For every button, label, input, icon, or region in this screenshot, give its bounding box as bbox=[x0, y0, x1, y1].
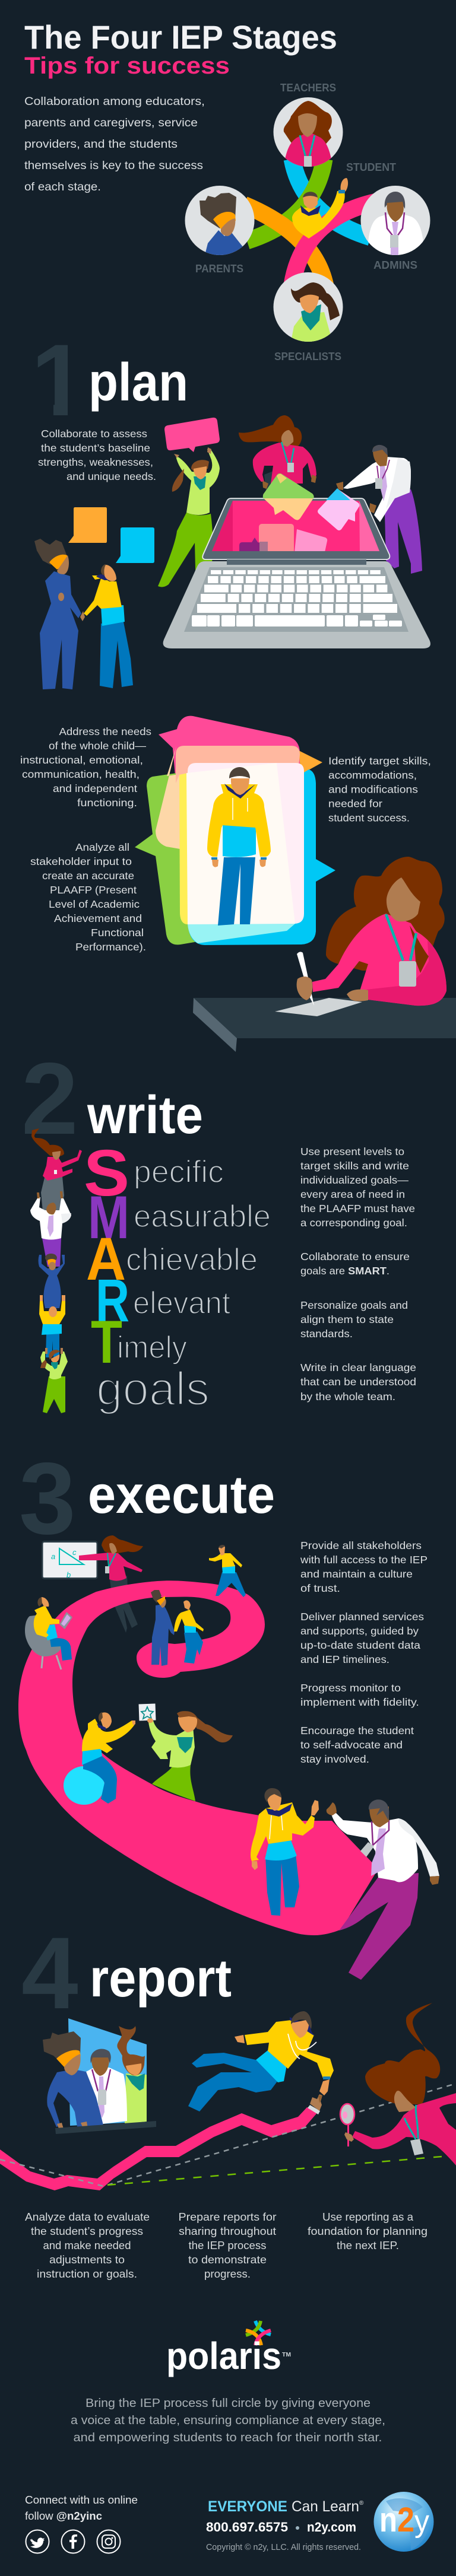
figure: parent bbox=[43, 2031, 103, 2130]
stage 2 text: Personalize goals and bbox=[300, 1299, 408, 1311]
n2y globe logo: y bbox=[414, 2504, 429, 2539]
social text: follow @n2yinc bbox=[25, 2510, 102, 2522]
label: parents: PARENTS bbox=[195, 262, 243, 275]
figure: running student bbox=[209, 1545, 246, 1597]
stage 1 PLAAFP text: create an accurate bbox=[42, 870, 134, 882]
stage 1 PLAAFP text: Functional bbox=[91, 927, 144, 939]
stage 3 heading bbox=[19, 1442, 275, 1556]
SMART acronym: chievable bbox=[126, 1242, 258, 1277]
paper bbox=[275, 998, 362, 1016]
stage 4 column 3 text: Use reporting as a bbox=[322, 2211, 414, 2223]
polaris logo: polaris bbox=[166, 2335, 281, 2377]
stage 1 text: the student’s baseline bbox=[41, 442, 150, 454]
icon: twitter bbox=[26, 2530, 49, 2553]
stage 1 whole child text: Address the needs bbox=[59, 726, 151, 737]
stage 4 column 3 text: the next IEP. bbox=[337, 2240, 399, 2251]
stage 3 heading: 3 bbox=[19, 1442, 76, 1556]
stage 4 illustration bbox=[0, 2003, 456, 2190]
n2y contact block: n2y.com bbox=[307, 2520, 356, 2534]
figure: parent bbox=[38, 1254, 65, 1308]
figure: specialist bbox=[40, 1348, 68, 1413]
intro text: Collaboration among educators, bbox=[24, 95, 205, 108]
stage 1 target skills text: Identify target skills, bbox=[328, 755, 431, 767]
figure: teacher bbox=[31, 1128, 82, 1211]
stage 2 heading: 2 bbox=[21, 1042, 78, 1156]
figure: student on ball bbox=[64, 1712, 135, 1805]
dashed target line: grey bbox=[0, 2084, 456, 2186]
stage 2 heading bbox=[21, 1042, 203, 1156]
SMART acronym: T bbox=[91, 1308, 122, 1376]
closing statement: a voice at the table, ensuring compliance at every stage, bbox=[71, 2413, 385, 2427]
figure: woman with magnifier bbox=[340, 2003, 456, 2165]
title: Tips for success bbox=[24, 53, 230, 79]
stakeholder diagram bbox=[185, 81, 430, 362]
speech bubble: orange bbox=[68, 507, 107, 543]
stage 1 PLAAFP text: stakeholder input to bbox=[30, 856, 132, 867]
stage 4 column 1 text: instruction or goals. bbox=[37, 2268, 137, 2280]
bubble: pink bbox=[159, 716, 300, 783]
stage 2 text: Collaborate to ensure bbox=[300, 1251, 410, 1262]
stage 3 text bbox=[300, 1540, 428, 1765]
whiteboard bbox=[42, 1541, 98, 1579]
stage 2 text: by the whole team. bbox=[300, 1391, 395, 1403]
stage 1 target skills text bbox=[328, 755, 431, 823]
intro text: of each stage. bbox=[24, 180, 101, 193]
stage 1 text: Collaborate to assess bbox=[41, 428, 147, 440]
stage 3 text: Progress monitor to bbox=[300, 1682, 401, 1694]
figure: student bbox=[292, 178, 348, 238]
hand and paintbrush bbox=[308, 2105, 320, 2114]
closing statement: and empowering students to reach for their north star. bbox=[74, 2431, 382, 2444]
stage 2 text: target skills and write bbox=[300, 1160, 409, 1172]
stage 4 column 1 text: adjustments to bbox=[49, 2254, 125, 2266]
avatar: teachers bbox=[273, 97, 343, 167]
stage 4 heading: report bbox=[90, 1949, 232, 2008]
social icons bbox=[26, 2530, 120, 2553]
stage 1 target skills text: accommodations, bbox=[328, 769, 417, 781]
figure: admin bbox=[336, 445, 422, 574]
avatar: parents bbox=[185, 186, 254, 256]
stage 4 heading bbox=[21, 1916, 232, 2030]
SMART acronym: A bbox=[86, 1225, 126, 1293]
stage 4 column 2 text: Prepare reports for bbox=[178, 2211, 277, 2223]
bubble overlaps bbox=[188, 924, 295, 943]
SMART acronym: M bbox=[88, 1184, 129, 1251]
stage 3 text: of trust. bbox=[300, 1582, 340, 1594]
stage 2 text: align them to state bbox=[300, 1314, 394, 1325]
figure: teacher bbox=[239, 415, 316, 492]
trend ribbon bbox=[0, 2107, 319, 2190]
desk bbox=[193, 998, 456, 1052]
n2y globe logo bbox=[374, 2492, 433, 2552]
closing statement: Bring the IEP process full circle by giving everyone bbox=[86, 2396, 370, 2410]
SMART acronym: R bbox=[96, 1267, 129, 1334]
whiteboard: a bbox=[51, 1552, 55, 1561]
figure: specialist with bubble bbox=[158, 418, 220, 593]
SMART acronym: elevant bbox=[133, 1286, 230, 1321]
stage 1 heading: plan bbox=[88, 353, 188, 412]
laptop screen bbox=[202, 473, 390, 565]
figure: admin bbox=[30, 1191, 71, 1267]
n2y globe logo: n bbox=[379, 2501, 397, 2539]
social text bbox=[25, 2494, 138, 2522]
figure: specialist with star card bbox=[139, 1704, 233, 1801]
stage 3 text: Deliver planned services bbox=[300, 1611, 424, 1623]
SMART acronym: goals bbox=[96, 1362, 210, 1415]
stage 1 text: and unique needs. bbox=[66, 470, 156, 482]
stage 3 text: implement with fidelity. bbox=[300, 1696, 419, 1708]
stage 2 text: the PLAAFP must have bbox=[300, 1203, 415, 1214]
title: The Four IEP Stages bbox=[24, 18, 337, 56]
stage 1 target skills text: needed for bbox=[328, 797, 382, 809]
n2y contact block: Copyright © n2y, LLC. All rights reserved. bbox=[206, 2542, 361, 2552]
stage 2 text: Write in clear language bbox=[300, 1362, 416, 1373]
stage 4 column 2 text: progress. bbox=[204, 2268, 251, 2280]
stage 2 text: standards. bbox=[300, 1328, 353, 1340]
intro text: providers, and the students bbox=[24, 138, 178, 151]
stage 1 whole child text bbox=[20, 726, 151, 809]
laptop base bbox=[163, 561, 430, 648]
stage 2 text: individualized goals— bbox=[300, 1174, 409, 1186]
stack of people bbox=[30, 1128, 82, 1413]
stage 3 heading: execute bbox=[88, 1465, 275, 1525]
window with three figures bbox=[43, 2018, 156, 2134]
stage 1 PLAAFP text: Analyze all bbox=[75, 841, 129, 853]
intro text: themselves is key to the success bbox=[24, 159, 203, 172]
icon: facebook bbox=[62, 2530, 84, 2553]
stage 3 text: to self-advocate and bbox=[300, 1739, 403, 1751]
stage 2 text: that can be understood bbox=[300, 1376, 416, 1388]
stage 1 text bbox=[38, 428, 156, 482]
stage 4 column 1 text: Analyze data to evaluate bbox=[25, 2211, 150, 2223]
stage 1 whole child text: of the whole child— bbox=[49, 740, 147, 752]
pink ribbon path bbox=[18, 1580, 378, 1935]
figure: parent and student bbox=[151, 1590, 204, 1666]
stage 1 text: strengths, weaknesses, bbox=[38, 456, 153, 468]
stage 4 column 2 text: sharing throughout bbox=[179, 2225, 276, 2237]
SMART acronym: S bbox=[84, 1137, 129, 1210]
stage 4 column 1 text: and make needed bbox=[43, 2240, 131, 2251]
keyboard keys bbox=[197, 572, 397, 609]
n2y contact block: Can Learn bbox=[292, 2498, 359, 2515]
overlapping speech bubbles with student bbox=[135, 716, 335, 945]
stage 3 text: Provide all stakeholders bbox=[300, 1540, 422, 1551]
stage 1 target skills text: student success. bbox=[328, 812, 410, 823]
stage 1 PLAAFP text: Achievement and bbox=[54, 912, 142, 924]
stage 1 heading: 1 bbox=[31, 323, 88, 437]
avatar: admins bbox=[361, 186, 430, 257]
stage 1 whole child text: functioning. bbox=[77, 797, 137, 809]
speech bubble: green bbox=[263, 473, 314, 520]
n2y globe logo: 2 bbox=[397, 2501, 414, 2539]
avatar: specialists bbox=[273, 272, 343, 342]
stage 4 column 2 text bbox=[178, 2211, 277, 2280]
stage 3 text: and maintain a culture bbox=[300, 1568, 413, 1580]
stage 2 text: a corresponding goal. bbox=[300, 1217, 407, 1229]
n2y contact block: EVERYONE bbox=[208, 2498, 287, 2515]
figure: teacher at board bbox=[79, 1535, 143, 1581]
figure: specialist bbox=[117, 2026, 147, 2124]
figure: student in chair bbox=[25, 1597, 72, 1669]
figure: teacher legs bbox=[109, 1576, 138, 1633]
stage 3 text: Encourage the student bbox=[300, 1725, 414, 1737]
n2y contact block bbox=[206, 2498, 364, 2552]
stage 4 column 1 text: the student’s progress bbox=[31, 2225, 143, 2237]
stage 4 column 3 text bbox=[308, 2211, 428, 2251]
bubble: cyan bbox=[188, 769, 335, 945]
n2y contact block: ® bbox=[359, 2500, 364, 2507]
label: admins: ADMINS bbox=[373, 259, 417, 271]
figure: jumping student bbox=[188, 2011, 334, 2111]
n2y contact block: 800.697.6575 bbox=[206, 2520, 288, 2534]
stage 2 text bbox=[300, 1146, 416, 1403]
SMART acronym bbox=[84, 1137, 271, 1415]
stage 1 PLAAFP text bbox=[30, 841, 146, 953]
figure: student standing bbox=[207, 767, 271, 926]
label: specialists: SPECIALISTS bbox=[274, 350, 341, 362]
stage 3 text: stay involved. bbox=[300, 1753, 369, 1765]
stage 1 whole child text: and independent bbox=[53, 783, 137, 794]
SMART acronym: imely bbox=[117, 1330, 187, 1365]
stage 1 whole child text: instructional, emotional, bbox=[20, 754, 143, 766]
stage 1 target skills text: and modifications bbox=[328, 783, 418, 795]
bubble: orange tail bbox=[299, 750, 322, 774]
stage 4 column 2 text: the IEP process bbox=[189, 2240, 266, 2251]
title bbox=[24, 18, 337, 79]
speech bubble: pink bbox=[164, 418, 220, 452]
stage 3 text: and IEP timelines. bbox=[300, 1653, 390, 1665]
figure: parent and student bbox=[34, 539, 133, 689]
figure: student bbox=[39, 1295, 65, 1357]
stage 4 column 3 text: foundation for planning bbox=[308, 2225, 428, 2237]
stage 4 column 1 text bbox=[25, 2211, 150, 2280]
whiteboard: b bbox=[66, 1570, 71, 1579]
figure: admin high five bbox=[327, 1799, 439, 1980]
polaris logo: TM bbox=[282, 2352, 291, 2358]
stage 1 PLAAFP text: Level of Academic bbox=[49, 898, 140, 910]
bubble: green bbox=[135, 769, 205, 944]
label: teachers: TEACHERS bbox=[280, 81, 336, 94]
woman writing at desk bbox=[193, 857, 456, 1052]
stage 1 whole child text: communication, health, bbox=[22, 768, 140, 780]
pen and hands bbox=[297, 952, 314, 1006]
closing statement bbox=[71, 2396, 385, 2444]
stage 3 text: up-to-date student data bbox=[300, 1639, 420, 1651]
screen bubbles bbox=[239, 524, 328, 551]
dashed target line: green bbox=[107, 2156, 448, 2185]
social text: Connect with us online bbox=[25, 2494, 138, 2506]
stage 4 column 2 text: to demonstrate bbox=[188, 2254, 267, 2266]
intro text bbox=[24, 95, 205, 193]
body bbox=[312, 914, 446, 1006]
stage 3 text: with full access to the IEP bbox=[300, 1554, 428, 1566]
icon: polaris star bbox=[246, 2321, 271, 2345]
SMART acronym: easurable bbox=[134, 1199, 271, 1234]
speech bubble: lilac bbox=[318, 488, 360, 530]
stage 1 PLAAFP text: PLAAFP (Present bbox=[50, 884, 137, 896]
figure: student high five bbox=[251, 1788, 319, 1916]
stage 2 text: goals are SMART. bbox=[300, 1265, 390, 1277]
SMART acronym: pecific bbox=[134, 1155, 224, 1190]
stage 1 PLAAFP text: Performance). bbox=[75, 941, 146, 953]
intro text: parents and caregivers, service bbox=[24, 116, 198, 129]
stage 4 heading: 4 bbox=[21, 1916, 78, 2030]
whiteboard: c bbox=[72, 1548, 77, 1557]
stage 3 illustration bbox=[18, 1535, 439, 1980]
label: student: STUDENT bbox=[346, 161, 397, 173]
stage 1 heading bbox=[38, 345, 185, 415]
laptop illustration bbox=[158, 415, 430, 648]
stage 2 text: Use present levels to bbox=[300, 1146, 404, 1157]
ribbons bbox=[244, 159, 376, 286]
stage 3 text: and supports, guided by bbox=[300, 1625, 419, 1637]
stage 2 text: every area of need in bbox=[300, 1188, 405, 1200]
stage 2 heading: write bbox=[87, 1086, 203, 1145]
icon: instagram bbox=[97, 2530, 120, 2553]
speech bubble: cyan bbox=[116, 527, 154, 563]
figure: admin bbox=[86, 2049, 127, 2124]
